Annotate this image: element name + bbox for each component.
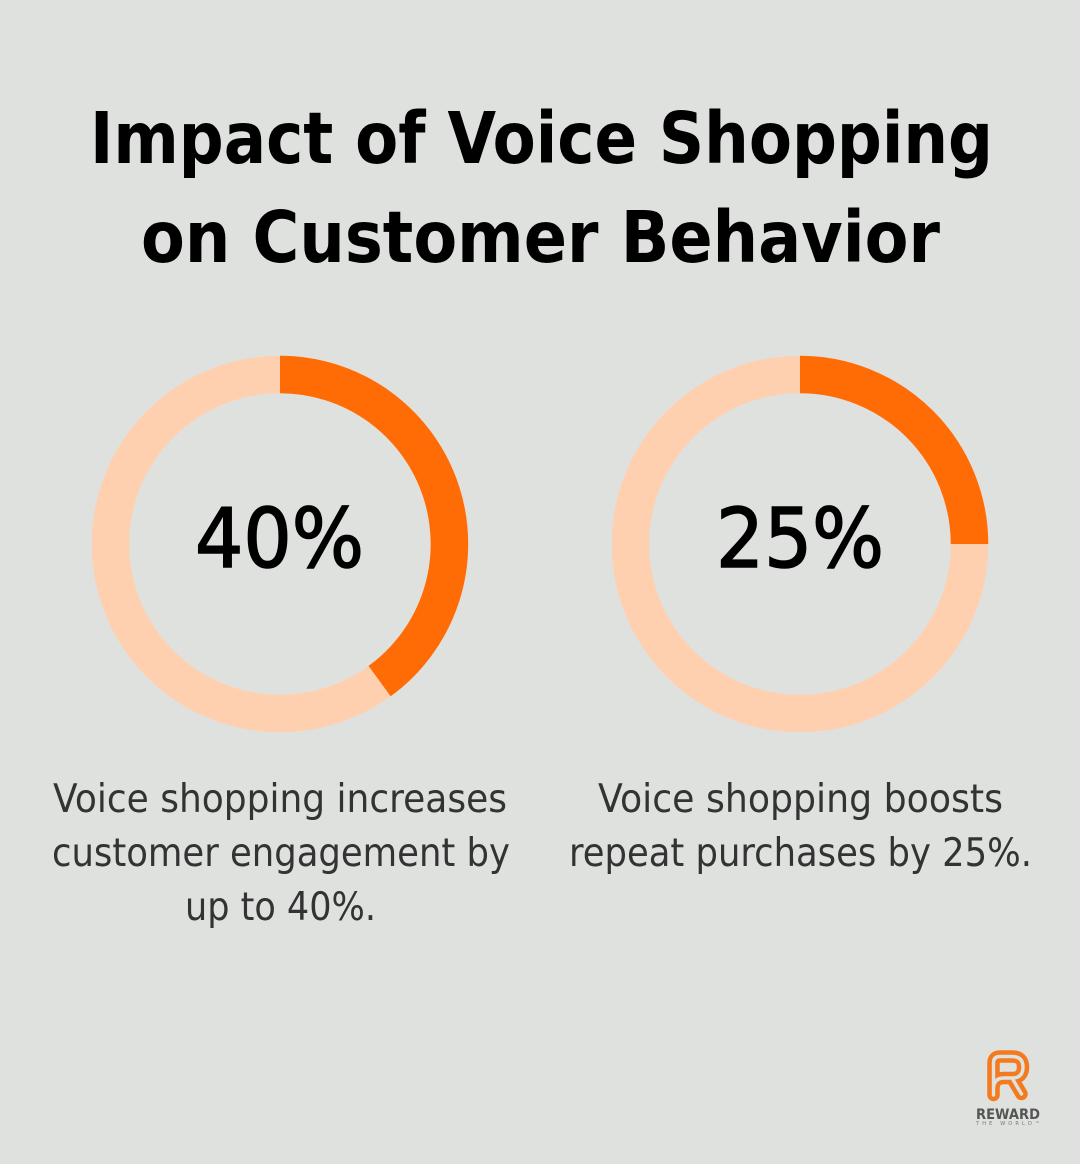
- logo: Reward the World: [975, 1056, 1040, 1127]
- description: 40%: Voice shopping increases: [53, 777, 507, 822]
- description: 40%: [52, 777, 510, 930]
- panel: 25% stat: [569, 374, 1032, 876]
- icon: R mark: [994, 1056, 1023, 1095]
- description: 40%: customer engagement by: [52, 831, 510, 876]
- value: 25%: 25%: [716, 492, 884, 587]
- description: 25%: [569, 777, 1032, 876]
- donut chart: 25%: [630, 374, 970, 714]
- panel: 40% stat: [52, 374, 510, 930]
- logo wordmark: REWARD: [976, 1107, 1040, 1123]
- description: 40%: up to 40%.: [185, 885, 376, 930]
- description: 25%: Voice shopping boosts: [598, 777, 1003, 822]
- logo tagline: THE WORLD™: [975, 1121, 1040, 1127]
- description: 25%: repeat purchases by 25%.: [569, 831, 1032, 876]
- donut chart: 40%: [110, 374, 450, 714]
- title: on Customer Behavior: [141, 196, 940, 279]
- title: [90, 97, 993, 279]
- value: 40%: 40%: [195, 492, 364, 587]
